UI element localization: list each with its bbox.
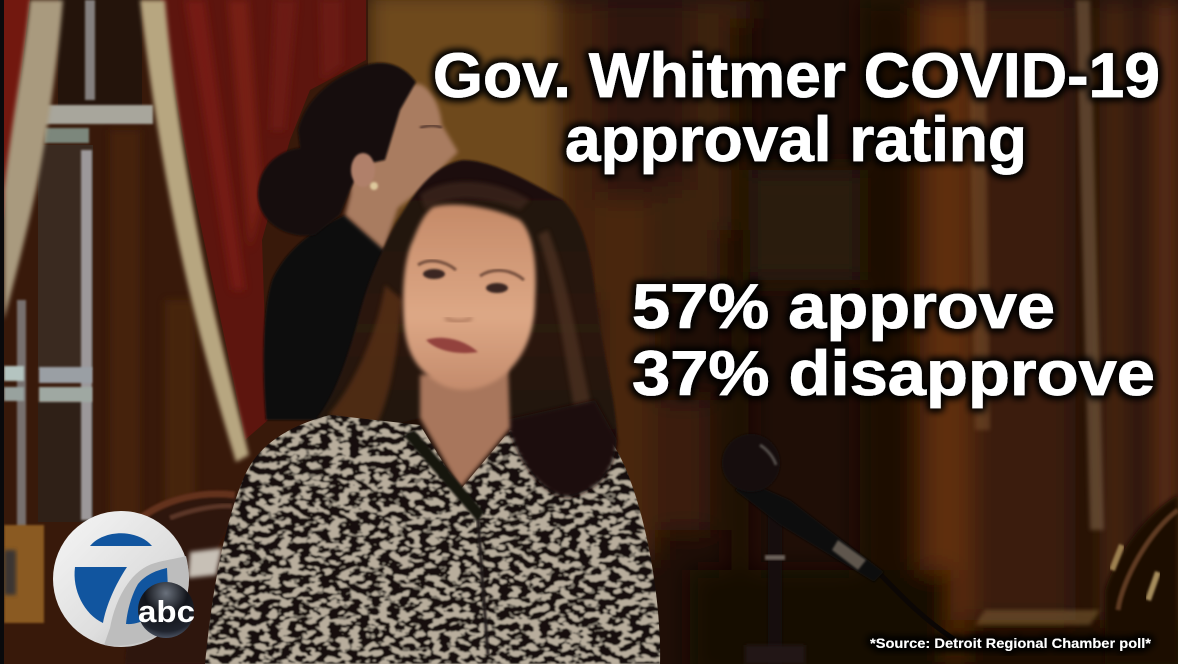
left margin strip (0, 0, 4, 664)
curtain tie-backs (4, 0, 249, 462)
subject jacket (200, 410, 665, 664)
logo top segment (90, 533, 152, 546)
aide ear and earring (351, 153, 375, 187)
background aide (258, 63, 458, 420)
wooden chairs (125, 491, 1178, 664)
aide hair (258, 63, 416, 236)
subject face (403, 205, 536, 390)
subject: woman (200, 160, 665, 664)
poll results: 57% approve (632, 272, 1055, 342)
title (433, 41, 1160, 175)
subject hair (317, 160, 617, 497)
subject hair highlights (328, 182, 592, 430)
title: approval rating (565, 105, 1027, 175)
hair over right shoulder (505, 400, 617, 497)
logo: 7 abc (53, 511, 195, 647)
subject facial features (418, 261, 524, 353)
jacket collar (404, 430, 484, 522)
left wall, curtains and window (0, 0, 368, 664)
logo gray swoosh (104, 556, 188, 646)
logo left segment (75, 567, 127, 623)
red curtains (4, 0, 366, 440)
aide body (264, 215, 395, 420)
window with blinds (4, 0, 153, 623)
microphone on stand (722, 434, 955, 664)
poll results: 37% disapprove (632, 339, 1155, 409)
title: Gov. Whitmer COVID-19 (433, 41, 1160, 111)
aide face and neck (345, 84, 458, 250)
source note: *Source: Detroit Regional Chamber poll* (870, 635, 1152, 651)
logo right segment (126, 568, 168, 624)
logo abc ball: abc (138, 594, 195, 629)
poll results (632, 272, 1155, 409)
subject neck (420, 365, 510, 488)
logo abc ball (138, 582, 195, 638)
